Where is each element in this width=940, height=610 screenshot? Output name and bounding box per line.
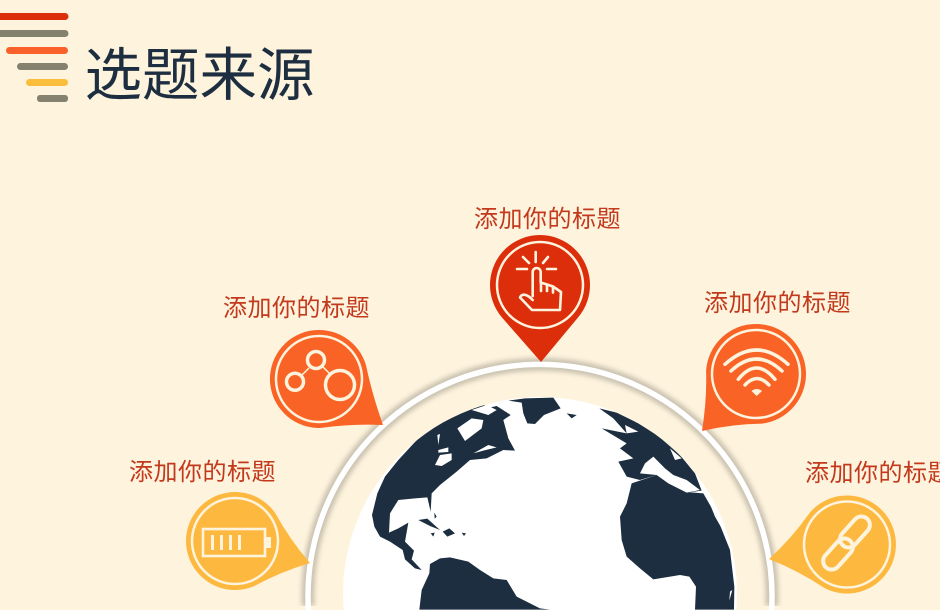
pin ring: yellow left xyxy=(192,498,278,584)
title: 选题来源 xyxy=(84,44,314,108)
pin body: orange left xyxy=(270,330,383,428)
pin: lower-left yellow xyxy=(129,459,310,590)
North America xyxy=(372,403,515,570)
pin body: yellow left xyxy=(186,492,310,590)
Greenland xyxy=(508,398,561,424)
pin ring: orange left xyxy=(276,336,362,422)
label: top: 添加你的标题 xyxy=(474,206,621,233)
pin ring: yellow right xyxy=(804,502,890,588)
icon: battery xyxy=(203,529,271,556)
label: upper right: 添加你的标题 xyxy=(704,290,851,317)
land highlights xyxy=(435,405,732,601)
globe ring xyxy=(308,364,772,610)
icon: pointing hand xyxy=(517,252,561,310)
pin ring: red xyxy=(497,242,583,328)
Caribbean islands xyxy=(418,413,577,537)
pin: lower-right yellow xyxy=(769,460,940,594)
pin: upper-right orange xyxy=(702,290,851,431)
Africa xyxy=(620,475,734,610)
pin body: red xyxy=(490,235,590,362)
South America xyxy=(419,557,550,610)
pin body: orange right xyxy=(702,324,806,431)
globe xyxy=(343,397,737,610)
pin body: yellow right xyxy=(769,496,896,594)
label: upper left: 添加你的标题 xyxy=(223,295,370,322)
pin: top red xyxy=(474,206,621,362)
icon: stacked title bars xyxy=(0,13,69,102)
icon: wifi xyxy=(725,350,788,396)
pin: upper-left orange xyxy=(223,295,383,428)
Eurasia xyxy=(599,408,702,493)
label: lower left: 添加你的标题 xyxy=(129,459,276,486)
pin ring: orange right xyxy=(712,330,800,418)
icon: chain link xyxy=(820,513,873,573)
icon: connected nodes xyxy=(286,352,354,400)
